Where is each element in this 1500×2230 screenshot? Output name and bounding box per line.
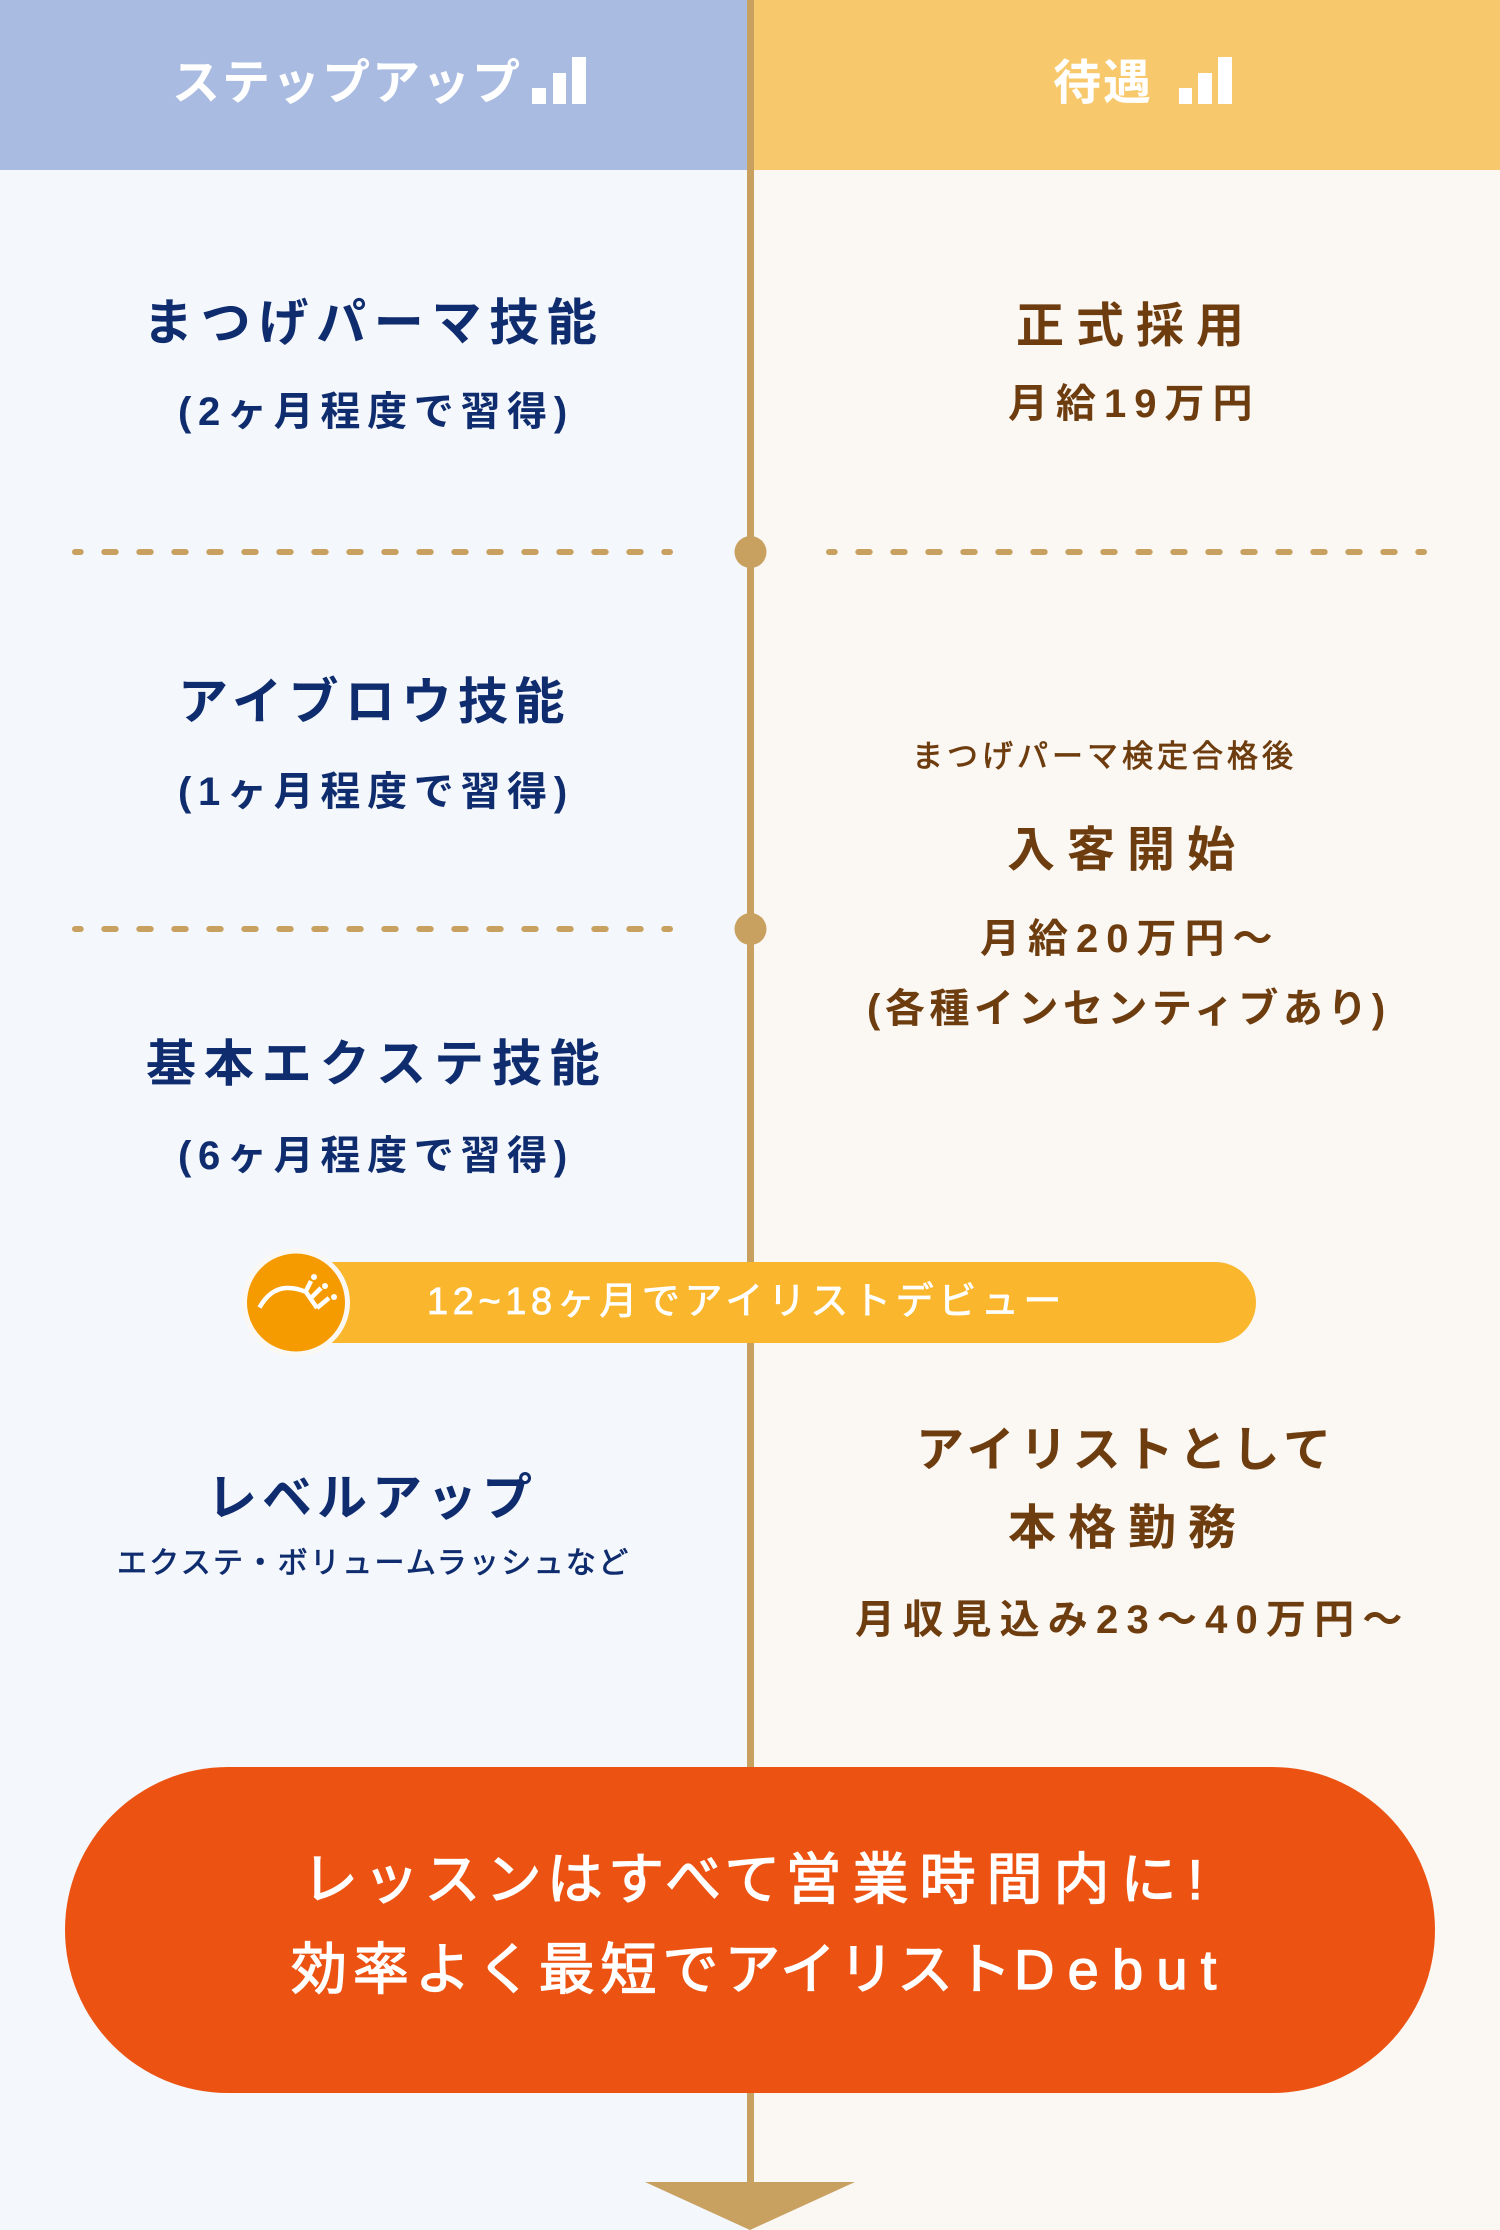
benefit: salary 190k: 月給19万円 <box>1008 382 1260 426</box>
benefit: start with clients: 入客開始 <box>1007 824 1247 877</box>
step: eyebrow duration: (1ヶ月程度で習得) <box>178 770 574 814</box>
timeline arrow head <box>645 2182 855 2230</box>
benefit: formal hire: 正式採用 <box>1016 300 1256 353</box>
header: step up <box>0 0 750 170</box>
icon: debut badge <box>242 1248 350 1356</box>
icon: bars <box>1179 57 1232 104</box>
divider row 1 <box>72 536 1427 568</box>
heading: benefits: 待遇 <box>1053 57 1153 110</box>
right column background <box>750 0 1500 2230</box>
icon: bars <box>532 57 586 104</box>
benefit: expected income: 月収見込み23〜40万円〜 <box>855 1598 1411 1642</box>
banner text: 12~18ヶ月でアイリストデビュー <box>427 1281 1066 1323</box>
benefit: salary 200k: 月給20万円〜 <box>980 917 1280 961</box>
step: eyebrow skill: アイブロウ技能 <box>178 674 571 730</box>
callout pill <box>65 1767 1435 2093</box>
callout line 2: 効率よく最短でアイリストDebut <box>291 1938 1229 2001</box>
callout line 1: レッスンはすべて営業時間内に! <box>302 1848 1214 1911</box>
step: level up detail: エクステ・ボリュームラッシュなど <box>117 1547 630 1580</box>
header: benefits <box>750 0 1500 170</box>
step: perm duration: (2ヶ月程度で習得) <box>178 390 574 434</box>
step: basic extension skill: 基本エクステ技能 <box>146 1036 608 1092</box>
benefit: after perm exam: まつげパーマ検定合格後 <box>912 739 1297 774</box>
step: level up: レベルアップ <box>207 1470 537 1526</box>
benefit: full duty: 本格勤務 <box>1008 1502 1248 1555</box>
step: extension duration: (6ヶ月程度で習得) <box>178 1134 574 1178</box>
debut banner <box>290 1262 1256 1343</box>
benefit: full eyelist: アイリストとして <box>916 1424 1336 1477</box>
timeline: vertical line <box>747 0 754 2190</box>
divider row 2 <box>72 913 766 944</box>
heading: step up: ステップアップ <box>172 57 522 110</box>
benefit: incentives: (各種インセンティブあり) <box>867 987 1390 1031</box>
step: eyelash perm skill: まつげパーマ技能 <box>143 295 605 351</box>
